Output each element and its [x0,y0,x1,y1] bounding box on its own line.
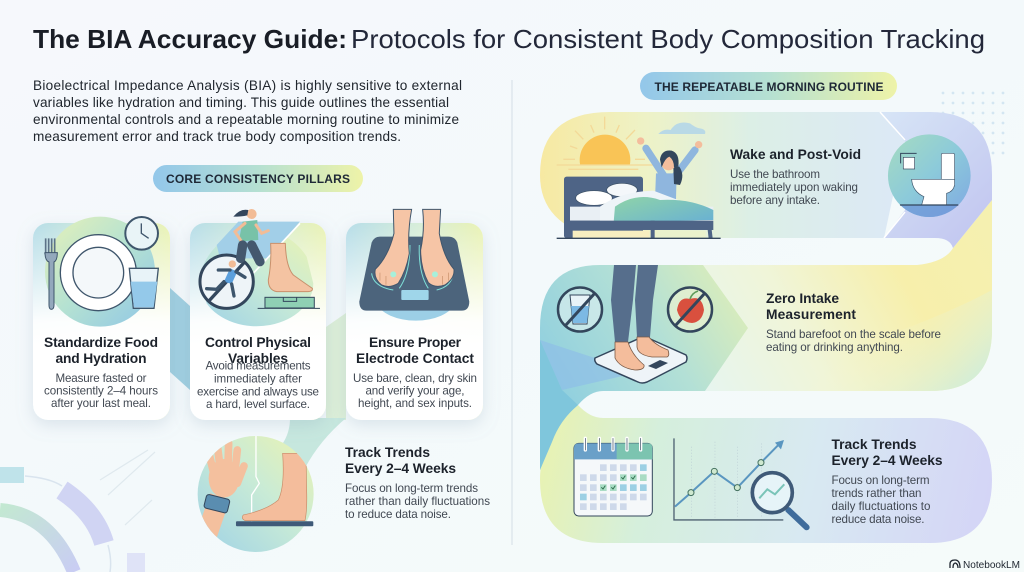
intro paragraph: environmental controls and a repeatable morning routine to minimize [33,112,459,127]
text: track trends (right): reduce data noise. [832,513,924,526]
heading: the repeatable morning routine: THE REPEATABLE MORNING ROUTINE [654,80,884,94]
panel: control physical variables [190,209,326,420]
text: track trends (right): Track Trends [832,437,917,452]
text: track trends (left): Every 2–4 Weeks [345,461,456,476]
text: zero intake measurement [766,291,941,354]
icon: hand and foot contact [198,436,314,552]
icon: no running, foot on level [200,209,320,326]
text: zero intake measurement: Measurement [766,307,856,322]
text: card one: after your last meal. [51,397,151,410]
text: card two: Control Physical [205,335,311,350]
title [33,24,985,54]
text: track trends (left): Focus on long-term trends [345,482,478,495]
text: card two: Variables [228,351,288,366]
text: card two: a hard, level surface. [206,398,310,411]
icon: toilet [887,134,973,218]
title: Protocols for Consistent Body Composition Tracking [351,24,985,54]
intro paragraph [33,78,462,144]
connector bands behind pillars [170,288,346,468]
divider [512,80,513,545]
panel: standardize food and hydration [33,217,170,420]
text: card two: exercise and always use [197,386,319,398]
text: wake and post-void: Use the bathroom [730,168,820,181]
title: The BIA Accuracy Guide: [33,24,347,54]
text: zero intake measurement: Zero Intake [766,291,839,306]
text: card three [353,335,477,410]
text: card three: Ensure Proper [369,335,462,350]
person stretching [637,137,702,200]
text: card one: consistently 2–4 hours [44,384,158,398]
text: card two: Avoid measurements [206,360,311,372]
text: track trends (right): trends rather than [832,487,922,500]
text: track trends (right): Every 2–4 Weeks [832,453,943,468]
legs and feet [611,265,669,370]
bed [557,177,721,238]
text: track trends (right) [832,437,943,526]
scale [595,337,687,383]
heading: the repeatable morning routine [640,72,897,100]
dot pattern [935,85,1010,160]
icon: feet on scale with no food and drink [558,265,712,383]
icon: plate, fork, clock and glass [44,217,158,327]
text: track trends (left) [345,445,490,521]
serpentine band: wake and post-void [540,112,992,248]
text: card three: Use bare, clean, dry skin [353,372,477,385]
text: track trends (left): rather than daily fluctuations [345,495,490,508]
text: wake and post-void [730,147,861,207]
text: zero intake measurement: eating or drinking anything. [766,341,903,354]
intro paragraph: measurement error and track true body composition trends. [33,129,401,144]
text: card one [44,335,158,410]
chart: rising trend with magnifier [674,438,807,527]
no food [668,288,712,332]
text: wake and post-void: before any intake. [730,194,820,207]
text: card one: Standardize Food [44,335,158,350]
text: track trends (right): daily fluctuations to [832,500,930,513]
no drink [558,288,602,332]
text: card one: and Hydration [56,351,146,366]
icon: calendar [574,438,652,516]
text: card two: immediately after [214,372,302,386]
text: card two [197,335,319,411]
text: zero intake measurement: Stand barefoot on the scale before [766,328,941,341]
intro paragraph: Bioelectrical Impedance Analysis (BIA) is highly sensitive to external [33,78,462,93]
text: wake and post-void: immediately upon waking [730,181,858,194]
large runner [233,209,268,262]
text: card three: and verify your age, [366,384,464,398]
text: card one: Measure fasted or [56,372,147,385]
text: wake and post-void: Wake and Post-Void [730,147,861,162]
heading: core consistency pillars [153,165,363,192]
text: track trends (left): to reduce data noise. [345,508,451,521]
text: card three: height, and sex inputs. [358,397,472,410]
icon: sunrise and bed [557,117,721,238]
text: track trends (left): Track Trends [345,445,430,460]
text: card three: Electrode Contact [356,351,474,366]
heading: core consistency pillars: CORE CONSISTENCY PILLARS [166,172,350,186]
icon: feet on scale [359,209,469,321]
decorative arcs bottom left [0,450,155,572]
small runner [207,260,245,296]
logo: NotebookLM: NotebookLM [963,559,1020,571]
panel: ensure proper electrode contact [346,209,483,420]
serpentine band: zero intake [540,200,992,470]
serpentine band: track trends [540,405,992,543]
text: track trends (right): Focus on long-term [832,474,930,487]
intro paragraph: variables like hydration and timing. This guide outlines the essential [33,95,449,110]
